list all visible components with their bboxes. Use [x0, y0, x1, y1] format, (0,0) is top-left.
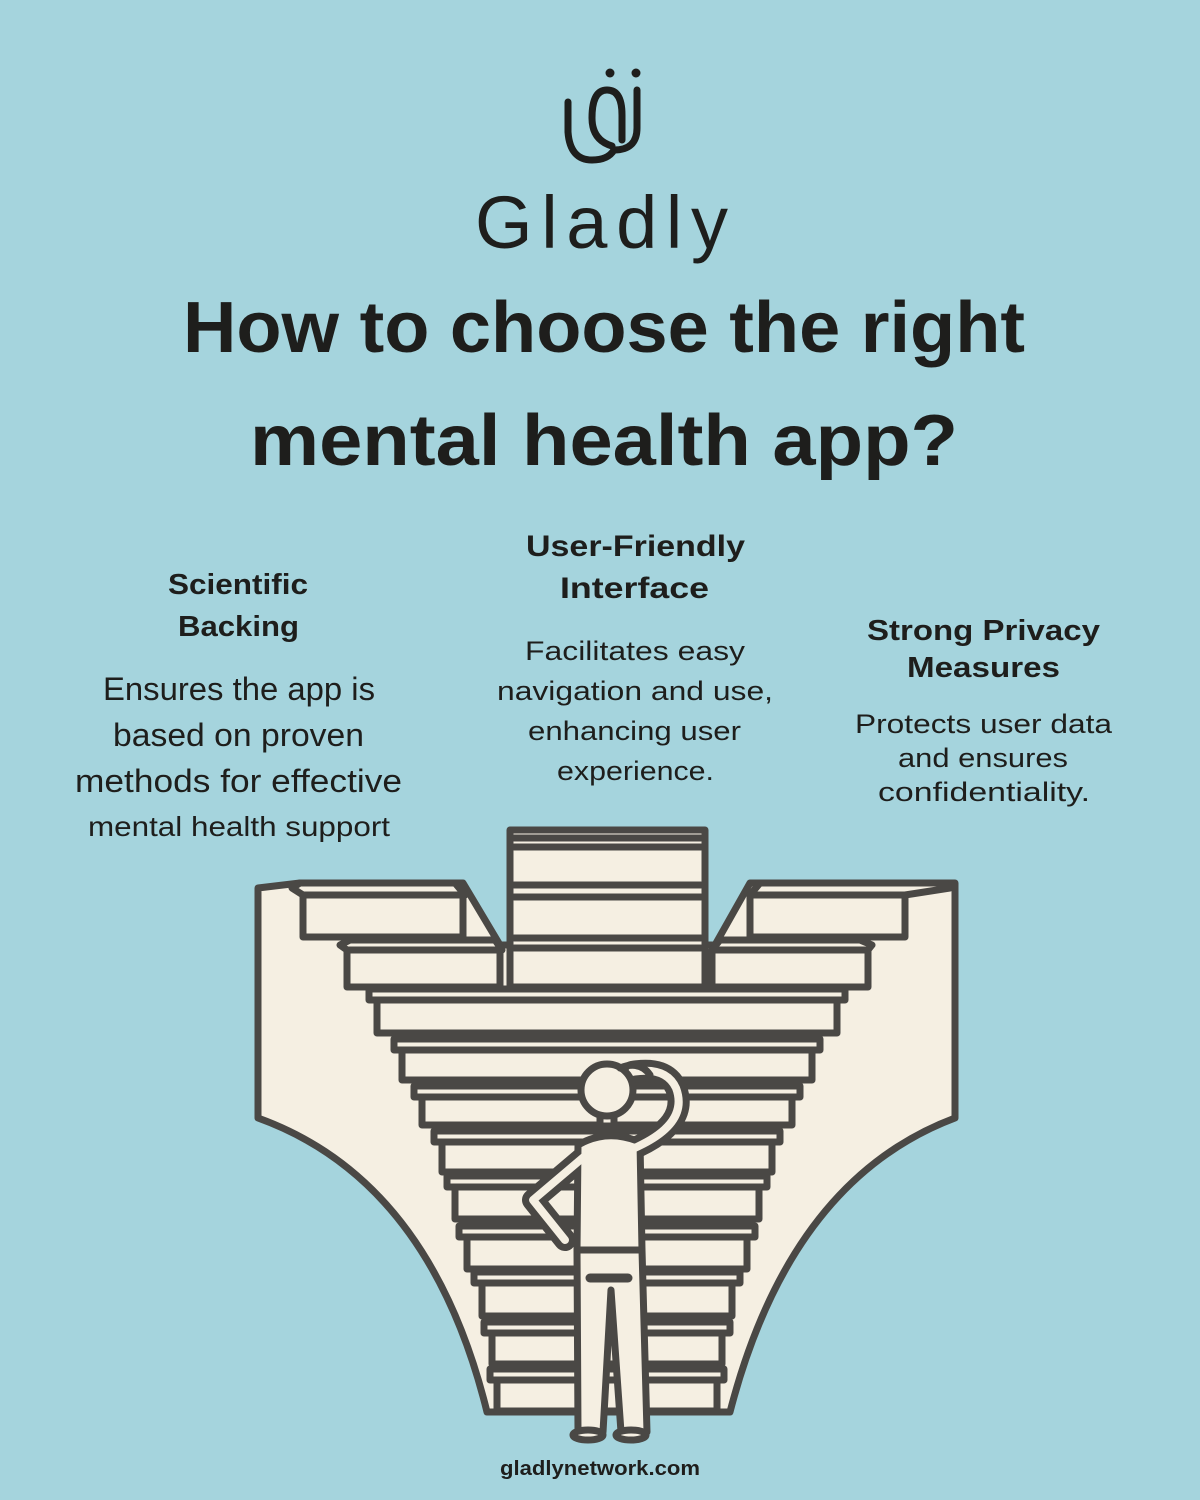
title	[183, 288, 1025, 481]
panel: user-friendly interface: Interface	[560, 572, 709, 605]
panel: scientific backing: mental health support	[88, 811, 390, 842]
right steps	[712, 883, 950, 987]
outer silhouette	[258, 883, 955, 1412]
panel: user-friendly interface: experience.	[557, 756, 714, 786]
central tower	[510, 830, 705, 987]
panel: scientific backing: Ensures the app is	[103, 671, 375, 707]
main stair rows	[369, 989, 845, 1411]
panel: strong privacy measures: Protects user data	[855, 709, 1113, 739]
panel: scientific backing: Scientific	[168, 569, 308, 601]
panel: scientific backing	[75, 569, 402, 842]
title: mental health app?	[250, 401, 958, 481]
logo icon	[568, 68, 640, 160]
panel: user-friendly interface: Facilitates easy	[525, 636, 746, 666]
person	[533, 1064, 679, 1440]
panel: scientific backing: Backing	[178, 611, 299, 643]
panel: strong privacy measures	[855, 615, 1113, 807]
brand name: Gladly	[475, 181, 728, 264]
panel: user-friendly interface: enhancing user	[528, 716, 741, 746]
panel: user-friendly interface	[497, 530, 773, 786]
panel: scientific backing: methods for effective	[75, 763, 402, 799]
title: How to choose the right	[183, 288, 1025, 368]
panel: user-friendly interface: navigation and use,	[497, 676, 773, 706]
illustration: staircase with person	[258, 830, 955, 1440]
panel: strong privacy measures: and ensures	[898, 743, 1068, 773]
left steps	[292, 883, 502, 987]
panel: strong privacy measures: Strong Privacy	[867, 615, 1100, 647]
footer url: gladlynetwork.com	[500, 1458, 700, 1480]
panel: user-friendly interface: User-Friendly	[526, 530, 745, 563]
panel: scientific backing: based on proven	[113, 717, 364, 753]
panel: strong privacy measures: confidentiality.	[878, 777, 1090, 807]
panel: strong privacy measures: Measures	[907, 652, 1060, 684]
